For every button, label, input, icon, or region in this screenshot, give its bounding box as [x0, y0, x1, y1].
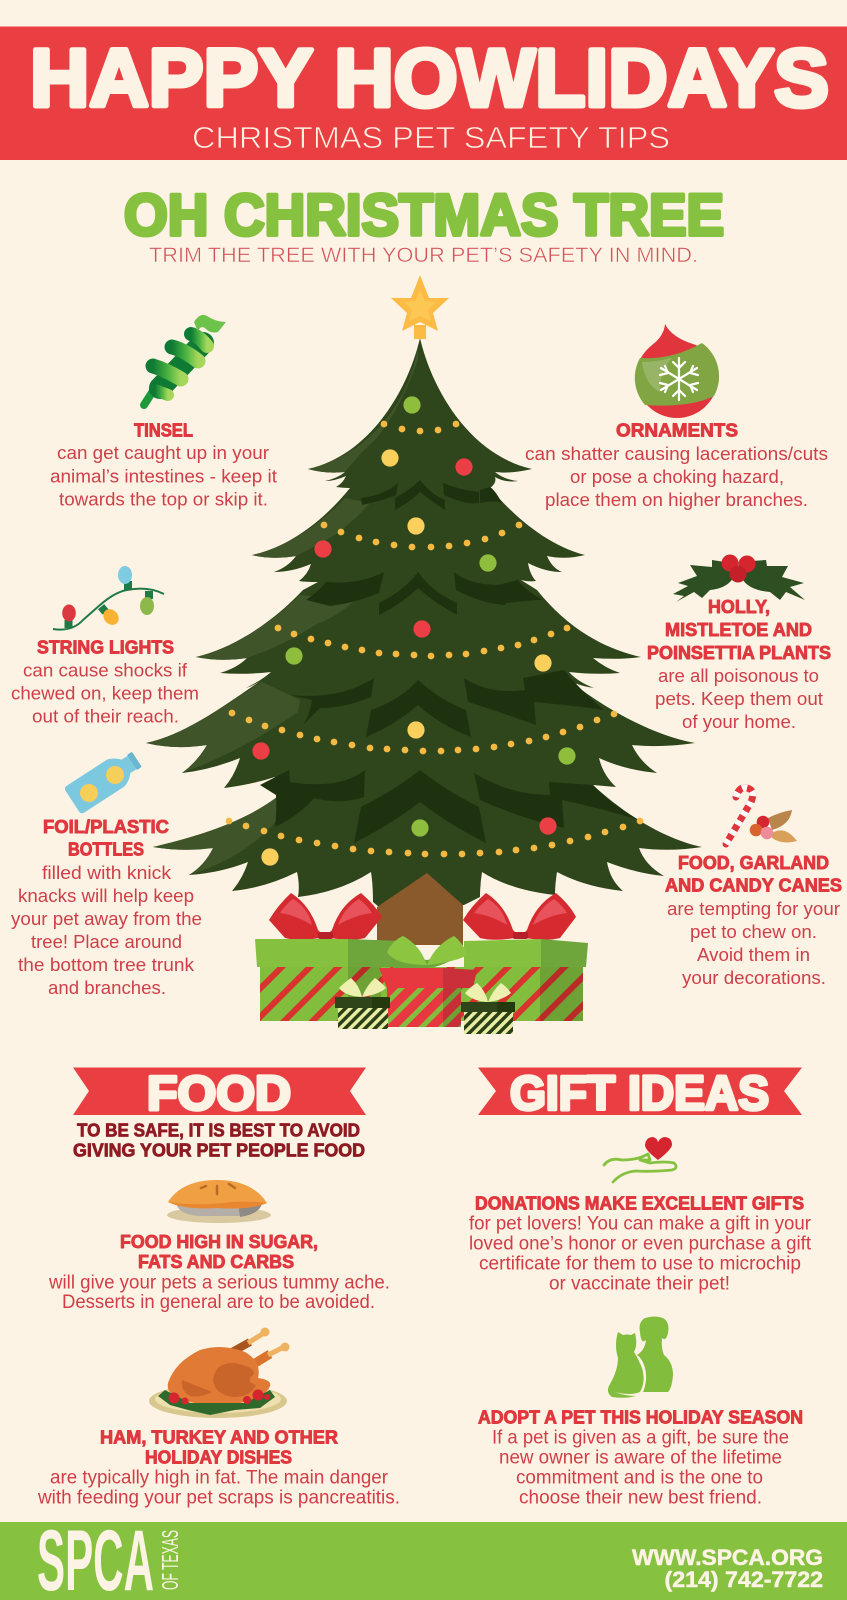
tree trunk: [377, 873, 463, 945]
tree shadow bands: [260, 480, 639, 843]
panel: food garland: your decorations.: [682, 968, 826, 988]
icon: cat and dog: [608, 1316, 673, 1398]
panel: holly: [647, 596, 831, 732]
panel: tinsel: animal’s intestines - keep it: [50, 466, 277, 486]
panel: foil bottles: FOIL/PLASTIC: [43, 816, 169, 837]
food intro: TO BE SAFE, IT IS BEST TO AVOID: [77, 1120, 360, 1140]
panel: holiday dishes: are typically high in fat. The main danger: [50, 1468, 389, 1488]
title: HAPPY HOWLIDAYS: [30, 33, 829, 124]
star topper: [391, 275, 449, 339]
panel: holiday dishes: [37, 1428, 400, 1508]
panel: foil bottles: and branches.: [48, 978, 166, 998]
small gift right: [461, 983, 515, 1034]
green bow: [387, 936, 468, 968]
panel: holly: pets. Keep them out: [655, 689, 823, 709]
panel: sweets: FOOD HIGH IN SUGAR,: [120, 1232, 318, 1252]
icon: pie: [167, 1180, 271, 1223]
panel: foil bottles: [11, 816, 202, 998]
panel: string lights: chewed on, keep them: [11, 684, 199, 704]
icon: ornament: [635, 324, 719, 418]
panel: foil bottles: BOTTLES: [68, 838, 144, 860]
icon: plastic bottle: [64, 746, 146, 815]
panel: string lights: STRING LIGHTS: [37, 636, 174, 658]
panel: ornaments: can shatter causing lacerations/cuts: [525, 444, 828, 464]
bottle contents: [80, 766, 124, 802]
panel: food garland: AND CANDY CANES: [665, 874, 842, 896]
logo: OF TEXAS: [157, 1530, 183, 1590]
panel: holly: MISTLETOE AND: [665, 619, 812, 640]
panel: tinsel: towards the top or skip it.: [59, 490, 268, 510]
panel: foil bottles: the bottom tree trunk: [18, 955, 195, 975]
banner: food: [73, 1068, 366, 1120]
red bow right: [463, 893, 576, 940]
panel: holiday dishes: HOLIDAY DISHES: [145, 1448, 292, 1468]
small gift left: [335, 978, 390, 1029]
panel: tinsel: TINSEL: [134, 420, 193, 440]
panel: tinsel: can get caught up in your: [57, 443, 269, 463]
panel: foil bottles: your pet away from the: [11, 909, 202, 929]
header band: [0, 26, 847, 160]
panel: foil bottles: tree! Place around: [31, 932, 182, 952]
panel: adopt: ADOPT A PET THIS HOLIDAY SEASON: [478, 1408, 803, 1428]
panel: food garland: [665, 852, 842, 988]
panel: ornaments: place them on higher branches.: [545, 490, 808, 510]
panel: foil bottles: filled with knick: [42, 863, 172, 883]
garland lights: [226, 421, 643, 857]
panel: string lights: can cause shocks if: [23, 660, 188, 680]
gifts: [255, 893, 588, 1034]
panel: adopt: new owner is aware of the lifetime: [499, 1448, 782, 1468]
panel: food garland: Avoid them in: [697, 945, 810, 965]
panel: donations: for pet lovers! You can make a gift in your: [469, 1214, 812, 1234]
panel: adopt: commitment and is the one to: [516, 1468, 763, 1488]
icon: string lights: [53, 566, 164, 630]
panel: food garland: are tempting for your: [667, 899, 840, 919]
panel: holiday dishes: with feeding your pet scraps is pancreatitis.: [37, 1488, 400, 1508]
panel: donations: loved one’s honor or even purchase a gift: [469, 1234, 812, 1254]
tree subheading: TRIM THE TREE WITH YOUR PET’S SAFETY IN MIND.: [149, 244, 698, 267]
heading: oh christmas tree: OH CHRISTMAS TREE: [124, 183, 724, 248]
panel: holly: POINSETTIA PLANTS: [647, 642, 831, 663]
panel: holly: of your home.: [682, 712, 796, 732]
snowflake: [660, 358, 698, 400]
icon: heart in hand: [604, 1137, 676, 1182]
tree highlights: [146, 346, 418, 875]
food intro: [73, 1120, 365, 1160]
panel: foil bottles: knacks will help keep: [18, 886, 194, 906]
panel: food garland: FOOD, GARLAND: [678, 852, 829, 873]
panel: sweets: [48, 1232, 390, 1313]
tree ornaments: [252, 396, 576, 866]
panel: sweets: FATS AND CARBS: [138, 1252, 294, 1272]
banner: gift ideas: GIFT IDEAS: [510, 1068, 769, 1120]
icon: holly: [673, 554, 805, 602]
panel: sweets: will give your pets a serious tummy ache.: [48, 1272, 390, 1294]
panel: string lights: out of their reach.: [32, 706, 179, 726]
panel: ornaments: or pose a choking hazard,: [570, 467, 784, 487]
contact: [632, 1545, 823, 1592]
contact: WWW.SPCA.ORG: [632, 1545, 823, 1570]
red bow left: [269, 893, 382, 940]
footer: [0, 1513, 847, 1600]
panel: tinsel: [50, 420, 277, 510]
panel: holly: HOLLY,: [708, 596, 770, 617]
panel: adopt: If a pet is given as a gift, be sure the: [492, 1428, 789, 1448]
panel: holiday dishes: HAM, TURKEY AND OTHER: [100, 1428, 338, 1448]
panel: donations: DONATIONS MAKE EXCELLENT GIFTS: [475, 1194, 804, 1214]
icon: tinsel: [144, 315, 226, 405]
panel: donations: or vaccinate their pet!: [549, 1274, 730, 1294]
food intro: GIVING YOUR PET PEOPLE FOOD: [73, 1140, 365, 1160]
banner: food: FOOD: [147, 1068, 291, 1120]
middle red gift: [379, 936, 477, 1027]
logo: [37, 1513, 183, 1600]
icon: turkey: [149, 1328, 290, 1418]
subtitle: CHRISTMAS PET SAFETY TIPS: [192, 120, 670, 155]
panel: ornaments: [525, 420, 828, 510]
christmas tree: [146, 275, 702, 945]
panel: sweets: Desserts in general are to be avoided.: [62, 1292, 375, 1313]
panel: holly: are all poisonous to: [658, 666, 819, 686]
panel: donations: certificate for them to use to microchip: [479, 1254, 801, 1274]
tree foliage: [146, 338, 702, 907]
panel: donations: [469, 1194, 812, 1294]
large striped gift box: [255, 939, 588, 1021]
panel: adopt: choose their new best friend.: [519, 1488, 762, 1508]
contact: (214) 742-7722: [664, 1567, 823, 1592]
panel: ornaments: ORNAMENTS: [616, 420, 738, 440]
panel: food garland: pet to chew on.: [690, 922, 817, 942]
panel: string lights: [11, 636, 199, 726]
icon: candy cane and garland: [726, 788, 797, 844]
panel: adopt: [478, 1408, 803, 1508]
